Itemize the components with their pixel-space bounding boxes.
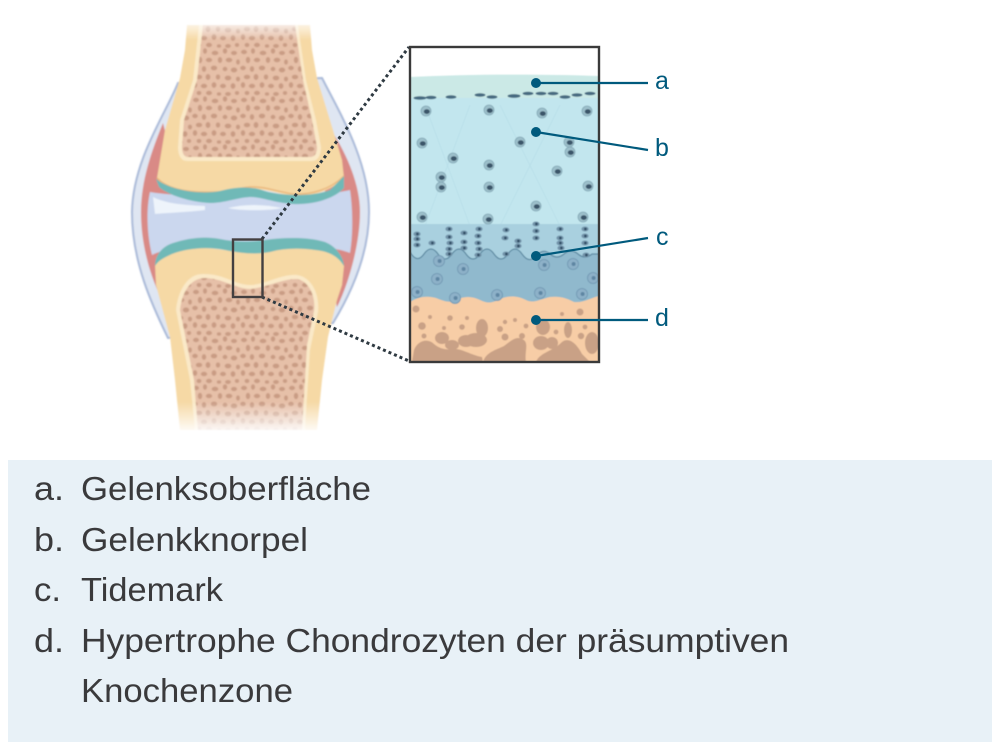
legend panel — [8, 460, 992, 742]
tidemark line — [410, 249, 599, 260]
lower cartilage: teal band — [155, 238, 344, 266]
legend item c: Tidemark — [81, 571, 224, 608]
fade: shaft top — [170, 18, 330, 40]
callout d: d — [655, 304, 669, 332]
layer c: calcified zone upper — [410, 224, 599, 260]
cells below tidemark — [412, 256, 598, 304]
fade: shaft bottom — [170, 402, 330, 434]
legend item b: Gelenkknorpel — [81, 521, 308, 558]
upper bone: spongy tissue — [182, 25, 317, 157]
layer b: articular cartilage — [410, 98, 599, 226]
upper bone: spongy tissue halo — [178, 25, 321, 161]
surface cells — [414, 92, 596, 100]
upper cartilage: orange edge — [157, 176, 344, 194]
bone: trabeculae — [412, 306, 599, 362]
layer c: below tidemark — [410, 249, 599, 305]
upper bone: cartilage — [157, 25, 344, 196]
legend item d — [34, 622, 789, 709]
joint space — [148, 190, 352, 255]
lower bone: spongy tissue — [180, 278, 314, 430]
callout c — [531, 223, 668, 261]
callout b — [531, 127, 669, 162]
callout b: b — [655, 134, 669, 162]
legend item c: c. — [34, 571, 61, 608]
joint capsule — [132, 78, 369, 338]
legend item d: d. — [34, 622, 64, 659]
synovial tissue: right — [325, 133, 360, 307]
illustration: knee joint overview — [132, 18, 369, 434]
legend item d: Hypertrophe Chondrozyten der präsumptiven — [81, 622, 789, 659]
inset: magnified cartilage layers — [410, 47, 599, 362]
callout a — [531, 67, 669, 95]
legend item a: Gelenksoberfläche — [81, 470, 371, 507]
zoom connector: upper dotted line — [262, 47, 409, 239]
synovial tissue: left — [141, 123, 175, 298]
lower bone: cartilage — [155, 247, 344, 430]
columnar cells above tidemark — [413, 222, 590, 258]
callout c: c — [656, 223, 668, 251]
legend item b: b. — [34, 521, 64, 558]
callout a: a — [655, 67, 669, 95]
upper cartilage: teal band — [156, 176, 344, 204]
layer d: presumptive bone zone — [410, 296, 599, 362]
lower bone: spongy tissue halo — [176, 274, 318, 430]
zoom connector: lower dotted line — [262, 297, 409, 361]
legend item d: Knochenzone — [81, 672, 293, 709]
layer a: surface zone — [410, 75, 599, 100]
zoom selection rectangle — [233, 240, 262, 297]
chondrocytes — [417, 105, 593, 224]
callout d — [531, 304, 669, 332]
inset frame — [410, 47, 599, 362]
legend item a: a. — [34, 470, 64, 507]
